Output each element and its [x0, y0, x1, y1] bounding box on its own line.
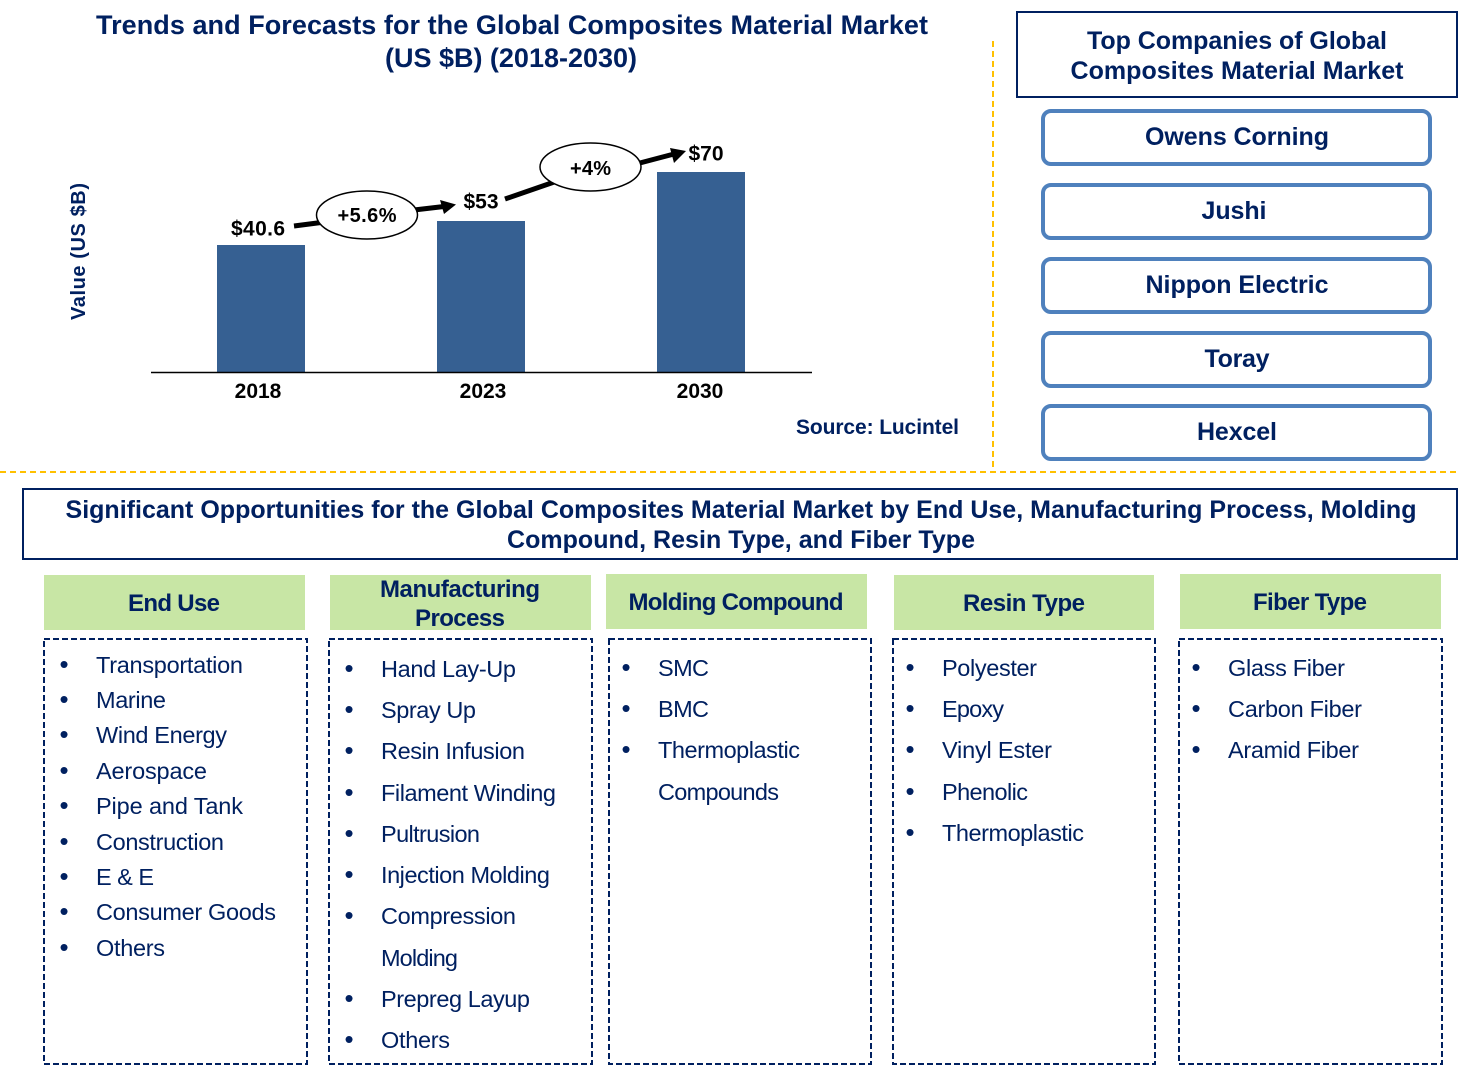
companies heading: Composites Material Market — [1070, 57, 1404, 85]
list: E & E — [96, 864, 154, 890]
bar 2023 — [437, 221, 525, 372]
value labels: $53 — [464, 190, 498, 214]
list: Injection Molding — [381, 862, 550, 888]
growth bubble +5.6%: +5.6% — [338, 205, 397, 227]
list: • — [60, 684, 69, 714]
list — [609, 639, 871, 1064]
header — [330, 575, 591, 632]
panel: Resin Type — [893, 575, 1155, 1064]
list: Epoxy — [942, 696, 1004, 722]
list: Others — [381, 1027, 450, 1053]
list: Marine — [96, 687, 166, 713]
list: Construction — [96, 829, 224, 855]
list — [1179, 639, 1442, 1064]
list: • — [1192, 734, 1201, 764]
growth bubble +4% — [540, 143, 641, 191]
bar 2018 — [217, 245, 305, 372]
header — [606, 574, 867, 629]
opportunities heading: Compound, Resin Type, and Fiber Type — [507, 526, 975, 554]
list: Filament Winding — [381, 780, 556, 806]
list: • — [60, 826, 69, 856]
bar 2030 — [657, 172, 745, 372]
list: • — [60, 896, 69, 926]
panel: Fiber Type — [1179, 574, 1442, 1064]
company: Hexcel: Hexcel — [1197, 418, 1277, 446]
year labels: 2018 — [235, 380, 282, 403]
growth bubble +4%: +4% — [570, 158, 611, 180]
list: • — [60, 719, 69, 749]
list: • — [344, 735, 354, 765]
chart title: (US $B) (2018-2030) — [385, 43, 637, 73]
company: Nippon Electric — [1043, 259, 1430, 312]
company: Jushi: Jushi — [1202, 197, 1266, 225]
list: Prepreg Layup — [381, 986, 530, 1012]
company: Owens Corning: Owens Corning — [1145, 123, 1329, 151]
chart title — [96, 10, 928, 73]
list: Transportation — [96, 652, 243, 678]
company: Nippon Electric: Nippon Electric — [1146, 271, 1329, 299]
list: • — [60, 932, 69, 962]
header: Fiber Type — [1253, 589, 1367, 616]
opportunities heading — [23, 489, 1457, 559]
year labels — [235, 380, 723, 403]
year labels: 2023 — [460, 380, 506, 403]
list: Consumer Goods — [96, 899, 276, 925]
growth arrow 2023 to 2030 — [505, 148, 686, 199]
header — [44, 575, 305, 630]
y axis label: Value (US $B) — [68, 183, 90, 320]
header: Resin Type — [963, 590, 1085, 617]
list: • — [60, 861, 69, 891]
list: • — [344, 900, 354, 930]
list: Thermoplastic — [942, 820, 1084, 846]
companies heading: Top Companies of Global — [1087, 27, 1387, 55]
list: • — [344, 983, 354, 1013]
list: Others — [96, 935, 165, 961]
chart title: Trends and Forecasts for the Global Composites Material Market — [96, 10, 928, 40]
list: Hand Lay-Up — [381, 656, 516, 682]
list: • — [906, 734, 915, 764]
header — [894, 575, 1154, 630]
list: • — [906, 652, 915, 682]
list: Phenolic — [942, 779, 1028, 805]
value labels: $70 — [688, 142, 724, 166]
list: • — [344, 1024, 354, 1054]
list: Aerospace — [96, 758, 207, 784]
companies heading — [1017, 12, 1457, 97]
panel: End Use — [44, 575, 307, 1064]
list: Compounds — [658, 779, 779, 805]
header: Molding Compound — [628, 589, 844, 616]
panel: Molding Compound — [606, 574, 871, 1064]
list: • — [622, 652, 631, 682]
list: Pipe and Tank — [96, 793, 243, 819]
growth bubble +5.6% — [316, 191, 418, 239]
list: • — [906, 817, 915, 847]
company: Hexcel — [1043, 406, 1430, 459]
list: Resin Infusion — [381, 738, 525, 764]
header: Process — [415, 605, 505, 632]
list: • — [1192, 693, 1201, 723]
list: Carbon Fiber — [1228, 696, 1362, 722]
company: Owens Corning — [1043, 111, 1430, 164]
company: Toray — [1043, 333, 1430, 386]
list — [329, 639, 592, 1064]
list: • — [344, 859, 354, 889]
list: • — [906, 776, 915, 806]
list: Vinyl Ester — [942, 737, 1052, 763]
value labels — [231, 142, 724, 240]
list: • — [344, 653, 354, 683]
list: Wind Energy — [96, 722, 227, 748]
list: Molding — [381, 945, 458, 971]
list: Aramid Fiber — [1228, 737, 1359, 763]
list: Glass Fiber — [1228, 655, 1345, 681]
list: • — [906, 693, 915, 723]
year labels: 2030 — [677, 380, 723, 403]
header — [1180, 574, 1441, 629]
list: Pultrusion — [381, 821, 480, 847]
list: • — [622, 693, 631, 723]
list: Spray Up — [381, 697, 476, 723]
list: SMC — [658, 655, 709, 681]
source: Source: Lucintel — [796, 416, 959, 439]
list: • — [60, 790, 69, 820]
header: End Use — [128, 590, 220, 617]
list: Compression — [381, 903, 516, 929]
list: BMC — [658, 696, 709, 722]
list: Thermoplastic — [658, 737, 800, 763]
list: Polyester — [942, 655, 1037, 681]
list — [893, 639, 1155, 1064]
company: Toray: Toray — [1204, 345, 1270, 373]
list: • — [60, 755, 69, 785]
panel: Manufacturing Process — [329, 575, 592, 1064]
header: Manufacturing — [380, 576, 540, 603]
opportunities heading: Significant Opportunities for the Global Composites Material Market by End Use, Manufacturing Process, Molding — [66, 496, 1416, 524]
bar chart — [68, 142, 812, 403]
list: • — [60, 649, 69, 679]
company: Jushi — [1043, 185, 1430, 238]
panel: top companies — [1017, 12, 1457, 459]
list: • — [344, 818, 354, 848]
list: • — [1192, 652, 1201, 682]
list: • — [344, 694, 354, 724]
list: • — [344, 777, 354, 807]
growth arrow 2018 to 2023 — [294, 200, 456, 226]
value labels: $40.6 — [231, 218, 285, 240]
list: • — [622, 734, 631, 764]
list — [44, 639, 307, 1064]
